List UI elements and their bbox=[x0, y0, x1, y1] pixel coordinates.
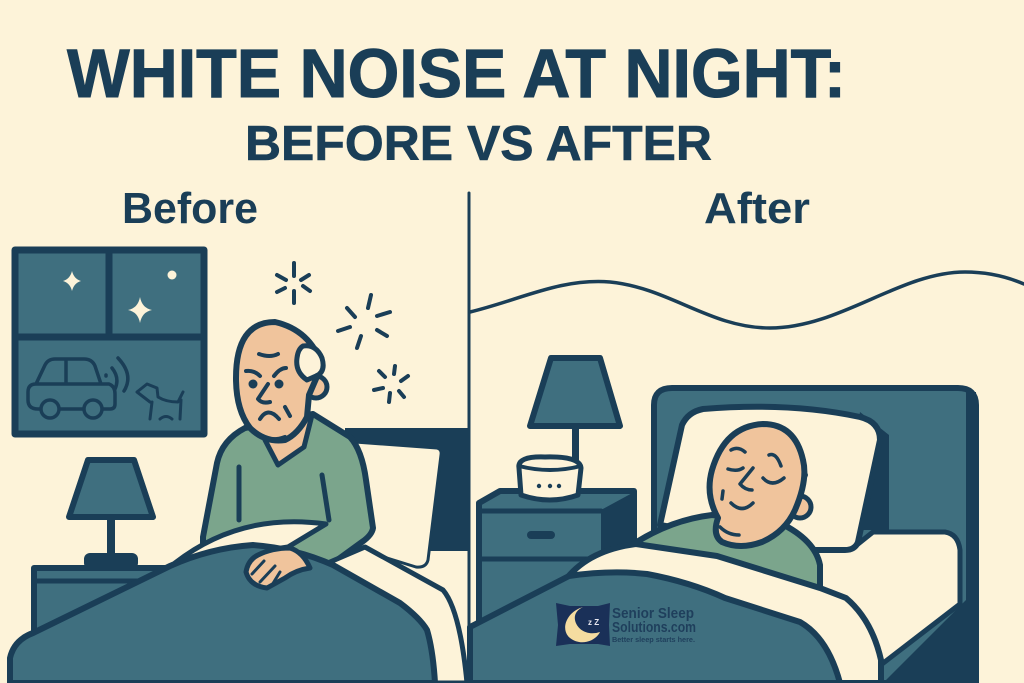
noise burst icons bbox=[277, 263, 408, 402]
window with night sky bbox=[15, 250, 204, 434]
panel: before scene bbox=[10, 250, 469, 683]
nightstand bbox=[34, 568, 175, 640]
man neck bbox=[265, 415, 312, 465]
pillow bbox=[660, 407, 880, 550]
pillow shadow bbox=[840, 412, 889, 530]
logo: Senior Sleep Solutions: Better sleep starts here. bbox=[612, 635, 695, 644]
logo: Senior Sleep Solutions: z Z bbox=[588, 618, 599, 627]
heading: before: Before bbox=[122, 184, 258, 233]
icon: car bbox=[28, 358, 128, 418]
bed headboard bbox=[345, 428, 469, 551]
hand bbox=[246, 548, 310, 588]
headboard bbox=[654, 388, 976, 683]
logo: Senior Sleep Solutions: Solutions.com bbox=[612, 620, 696, 636]
title: WHITE NOISE AT NIGHT: bbox=[67, 35, 846, 112]
lamp bbox=[530, 358, 620, 466]
panel: after scene bbox=[470, 272, 1024, 683]
white noise sound wave bbox=[470, 272, 1024, 328]
man head bbox=[710, 424, 811, 546]
lamp bbox=[69, 460, 153, 569]
pillow bbox=[345, 442, 441, 567]
man body bbox=[632, 515, 820, 590]
mattress bbox=[812, 532, 960, 664]
man head bbox=[236, 322, 327, 440]
white sheet bbox=[567, 544, 881, 683]
logo: Senior Sleep Solutions bbox=[556, 603, 696, 646]
subtitle: BEFORE VS AFTER bbox=[245, 117, 712, 171]
blanket bbox=[470, 572, 840, 683]
logo: Senior Sleep Solutions: Senior Sleep bbox=[612, 606, 694, 622]
man body bbox=[203, 414, 373, 570]
white noise machine bbox=[519, 457, 581, 500]
white sheet bbox=[330, 547, 467, 683]
divider bbox=[468, 193, 470, 683]
icon: dog bbox=[137, 384, 183, 419]
nightstand bbox=[479, 491, 636, 640]
heading: after: After bbox=[704, 184, 810, 233]
blanket bbox=[10, 545, 435, 683]
